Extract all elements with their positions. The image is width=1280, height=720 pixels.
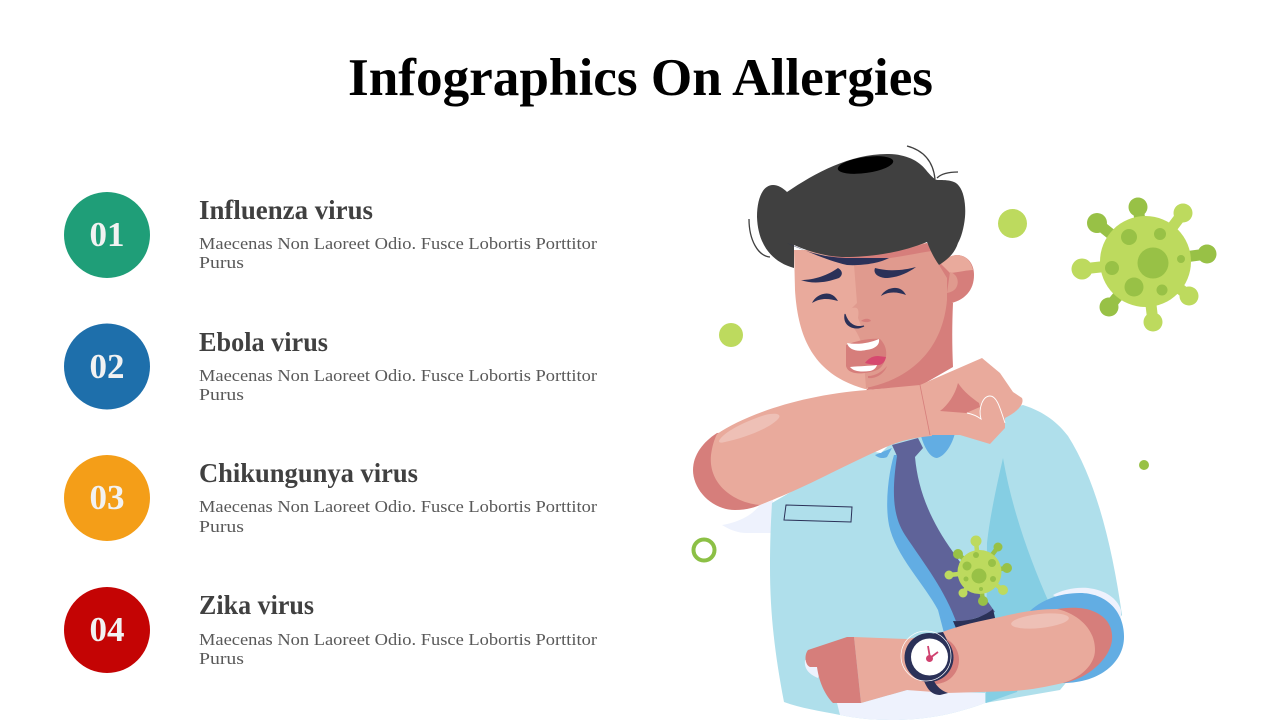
thumb outline	[967, 396, 1005, 423]
heading: Ebola virus: Ebola virus	[199, 327, 328, 357]
shirt shadow under arm	[722, 500, 773, 533]
description 03	[199, 497, 598, 536]
description 02	[199, 366, 598, 404]
list item 01: Influenza virus	[64, 192, 598, 278]
hair	[749, 146, 965, 268]
number badge 01	[64, 192, 150, 278]
lower arm	[805, 608, 1112, 703]
ear	[939, 255, 974, 304]
lower teeth	[850, 365, 877, 372]
number badge 03	[64, 455, 150, 541]
description 04	[199, 630, 598, 668]
rolled sleeve	[1028, 588, 1124, 683]
left eye	[812, 293, 838, 303]
wrist crease	[920, 385, 930, 435]
fist	[920, 358, 1023, 444]
list item 02: Ebola virus	[64, 324, 598, 410]
number badge 04: 04	[90, 610, 124, 649]
nose line	[845, 314, 864, 328]
wristwatch	[901, 631, 959, 695]
upper teeth	[847, 339, 879, 351]
brow band	[787, 243, 889, 265]
fist shadow	[940, 383, 980, 413]
description 01: Purus	[199, 253, 244, 272]
right collar	[921, 433, 955, 458]
description 04: Maecenas Non Laoreet Odio. Fusce Lobortis Porttitor	[199, 630, 598, 649]
tie edge	[887, 455, 958, 633]
hand	[806, 637, 861, 703]
nose	[845, 308, 862, 328]
number badge 01: 01	[90, 215, 124, 254]
tie end	[953, 609, 996, 633]
description 04: Purus	[199, 649, 244, 668]
number badge 03: 03	[90, 478, 124, 517]
shirt	[770, 405, 1122, 720]
arm highlight	[719, 414, 779, 443]
face	[794, 243, 947, 389]
left eyelash	[801, 268, 842, 282]
forehead shadow	[823, 243, 932, 260]
right eyelash	[874, 267, 916, 278]
tongue	[865, 356, 886, 365]
right eye	[881, 288, 906, 296]
description 03: Purus	[199, 517, 244, 536]
number badge 02	[64, 324, 150, 410]
heading: Zika virus: Zika virus	[199, 590, 314, 620]
shirt fold	[986, 458, 1050, 703]
description 02: Purus	[199, 385, 244, 404]
list item 03: Chikungunya virus	[64, 455, 598, 541]
description 01: Maecenas Non Laoreet Odio. Fusce Lobortis Porttitor	[199, 234, 598, 253]
number badge 04	[64, 587, 150, 673]
watch hands	[928, 646, 938, 658]
shirt pocket	[784, 505, 852, 522]
description 03: Maecenas Non Laoreet Odio. Fusce Lobortis Porttitor	[199, 497, 598, 516]
arm highlight	[1010, 611, 1070, 631]
illustration: man sneezing into elbow	[693, 146, 1216, 720]
green ring	[694, 540, 714, 560]
neck	[860, 300, 953, 390]
description 02: Maecenas Non Laoreet Odio. Fusce Lobortis Porttitor	[199, 366, 598, 385]
hand cuff shadow	[805, 660, 825, 678]
heading: Influenza virus: Influenza virus	[199, 195, 373, 225]
chin shadow	[868, 366, 887, 378]
title: Infographics On Allergies	[348, 49, 933, 107]
decorative green dots	[719, 209, 1149, 588]
hair strands	[749, 146, 958, 257]
icon: large virus	[1072, 198, 1216, 332]
hair highlight	[837, 153, 894, 177]
mouth	[846, 339, 886, 373]
heading: Chikungunya virus: Chikungunya virus	[199, 458, 418, 488]
list item 04: Zika virus	[64, 587, 598, 673]
description 01	[199, 234, 598, 272]
tie	[892, 438, 995, 624]
collar and tie	[875, 433, 996, 633]
number badge 02: 02	[90, 347, 124, 386]
raised upper arm	[693, 358, 1023, 510]
small virus on shirt	[944, 536, 1012, 606]
shirt hem	[837, 690, 985, 720]
left collar	[875, 448, 892, 458]
